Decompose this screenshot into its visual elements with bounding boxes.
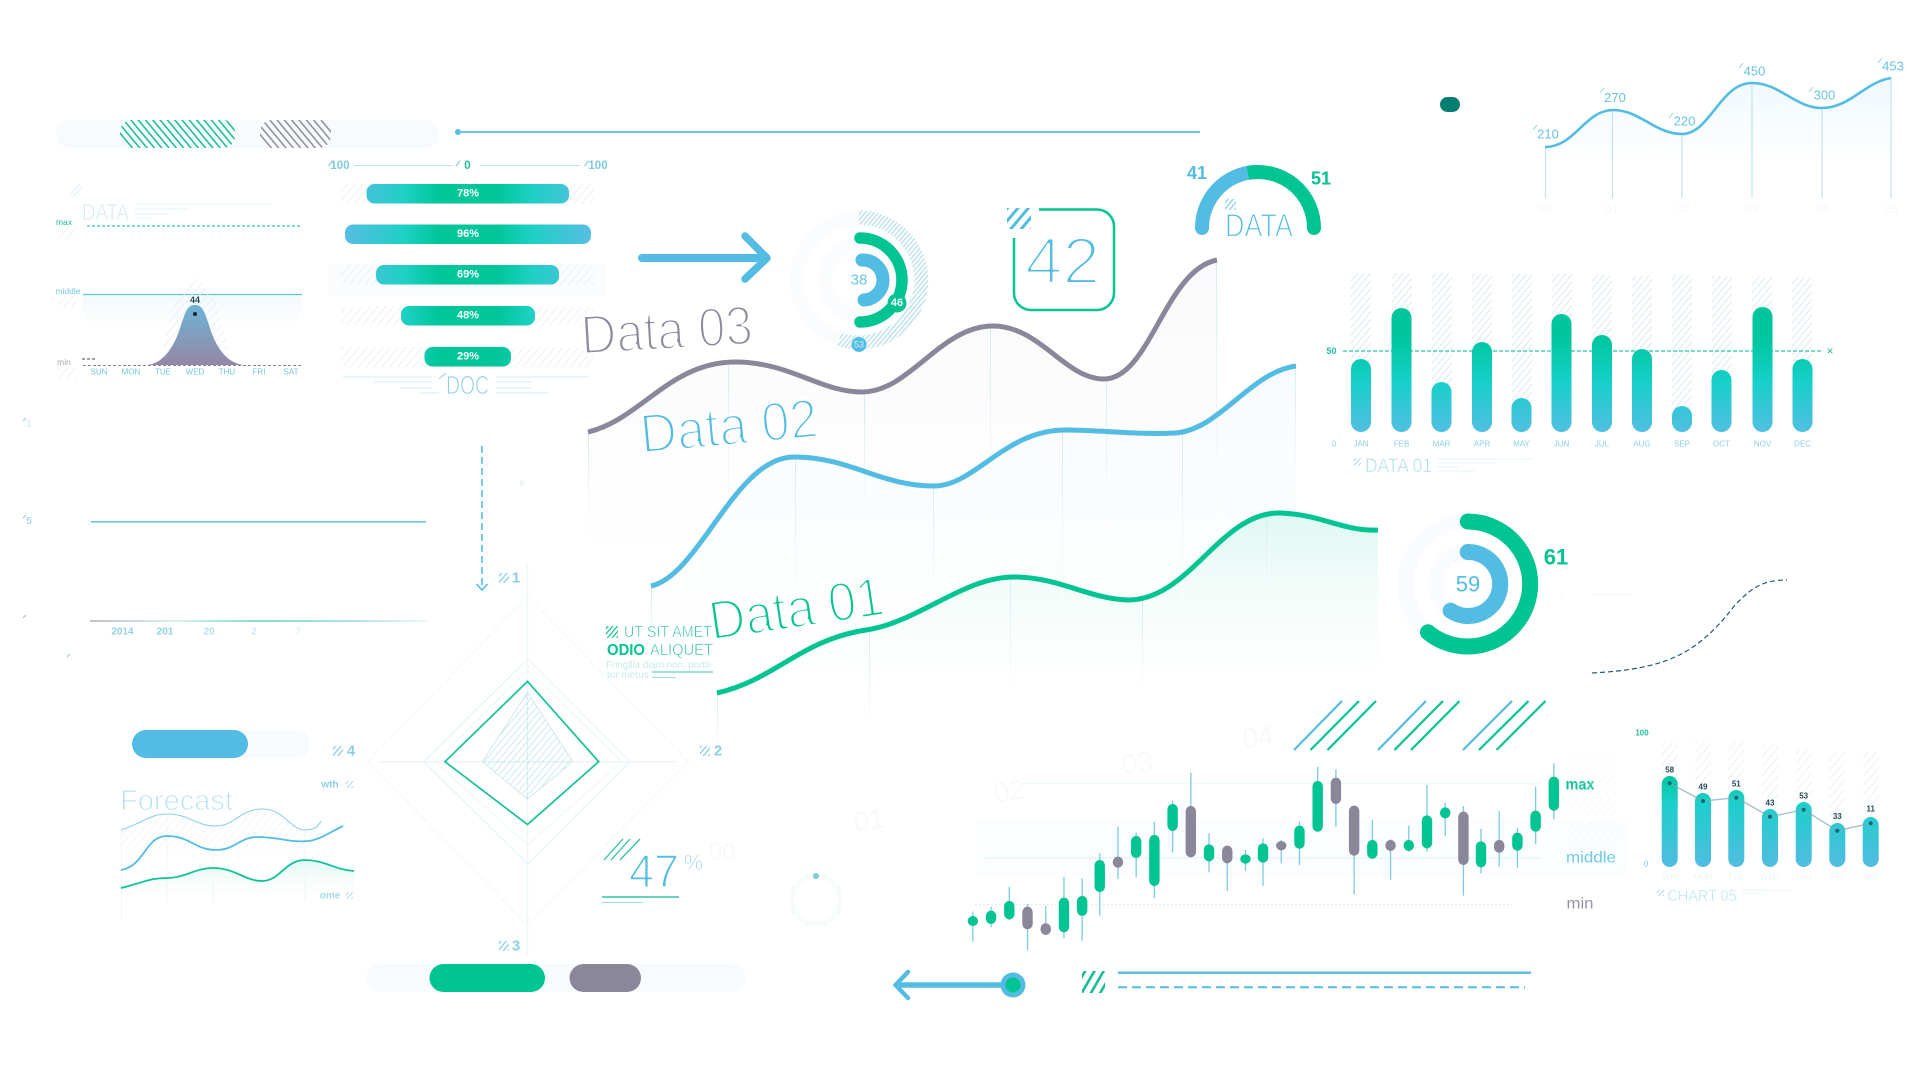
- panel: faint left lines: 1: [26, 418, 32, 430]
- heading Forecast: Forecast: [120, 785, 233, 817]
- label DOC: [343, 370, 589, 400]
- series Data 01 curve: [717, 513, 1378, 693]
- top pill bar: [56, 120, 439, 148]
- bottom pill bar: [366, 964, 746, 992]
- panel: chart 05 bars: 100: [1635, 728, 1649, 738]
- day labels: SUN: [1661, 872, 1678, 882]
- value labels: 58: [1665, 766, 1675, 774]
- weekday labels: FRI: [253, 368, 265, 376]
- trend line: [1668, 781, 1873, 833]
- bar 29%: [424, 347, 511, 366]
- curve middle: [121, 826, 343, 870]
- donut chart 59 / 61: 59: [1456, 572, 1480, 596]
- panel: forecast mini chart: [120, 780, 354, 921]
- bar 69%: [376, 265, 559, 284]
- label DATA 01: DATA 01: [1365, 456, 1432, 477]
- triple slash decoration: [1294, 701, 1546, 750]
- curve bottom: [121, 860, 354, 888]
- scale header: 100: [588, 160, 608, 172]
- value labels: 300: [1814, 88, 1835, 102]
- upper line: [91, 521, 426, 523]
- scale header: [329, 160, 608, 172]
- faint spinner: [792, 873, 840, 924]
- text block: UT SIT AMET: UT SIT AMET: [624, 624, 712, 641]
- bar 69%: 69%: [457, 268, 479, 280]
- faint axis labels: [1538, 202, 1898, 216]
- half gauge 41 / 51: 41: [1187, 163, 1207, 183]
- axis labels: 3: [512, 938, 520, 954]
- value labels: 11: [1866, 804, 1875, 814]
- year labels: 20: [203, 626, 215, 638]
- weekday labels: SAT: [284, 368, 299, 376]
- bars: [1351, 307, 1812, 432]
- weekday labels: THU: [219, 368, 235, 376]
- year labels: 2: [251, 626, 257, 638]
- value labels: 49: [1699, 782, 1708, 792]
- day labels: SAT: [1863, 872, 1878, 882]
- lower multicolor line: [90, 620, 427, 622]
- top timeline line: [455, 129, 1200, 135]
- bar 48%: 48%: [457, 310, 479, 322]
- axis labels: 2: [714, 742, 722, 760]
- panel: monthly bar chart: 50: [1326, 346, 1337, 356]
- month labels: NOV: [1754, 440, 1772, 448]
- progress pill blue: [132, 730, 310, 758]
- concentric radial gauge: 53: [854, 340, 864, 350]
- concentric radial gauge: 38: [851, 272, 867, 288]
- text block: UT SIT AMET: tor metus.: [607, 670, 651, 681]
- axis labels max middle min: middle: [55, 286, 81, 296]
- text block: UT SIT AMET: Fringilla diam non, portti-: [606, 660, 713, 671]
- axis labels max middle min: max: [56, 217, 73, 227]
- faint axis labels: 04: [1815, 202, 1829, 216]
- scale header: 100: [330, 160, 350, 172]
- month labels: JAN: [1353, 440, 1369, 448]
- bar 29%: 29%: [457, 350, 479, 362]
- value labels: 453: [1882, 58, 1904, 74]
- value labels: 270: [1604, 90, 1626, 105]
- axis labels max middle min: min: [57, 357, 71, 367]
- hatched backgrounds: [1351, 273, 1812, 409]
- bar 96%: [345, 224, 591, 244]
- value labels: [1533, 58, 1904, 142]
- area fills: [588, 260, 1378, 720]
- dashed arrow down: [476, 446, 488, 590]
- hump area: 44: [190, 295, 200, 305]
- month labels: FEB: [1394, 440, 1409, 448]
- hump area: [147, 275, 244, 365]
- label Data 02: Data 02: [637, 387, 820, 465]
- half gauge 41 / 51: DATA: [1225, 208, 1294, 244]
- panel: chart 05 bars: [1635, 728, 1879, 905]
- concentric radial gauge: [797, 218, 921, 352]
- text block: UT SIT AMET: ALIQUET: [650, 642, 713, 659]
- heading: DATA: DATA: [82, 199, 130, 225]
- scale header: 0: [464, 160, 471, 172]
- panel: faint left lines: 5: [26, 516, 32, 527]
- value labels: 220: [1674, 114, 1695, 128]
- number card 42: [1007, 208, 1114, 310]
- month labels: MAR: [1433, 440, 1451, 448]
- weekday labels: MON: [122, 368, 141, 376]
- faint axis labels: 00: [1538, 202, 1552, 216]
- faint axis numerals: 03: [1119, 745, 1155, 781]
- year labels: 2014: [111, 626, 134, 638]
- donut chart 59 / 61: 61: [1544, 544, 1568, 570]
- half gauge 41 / 51: [1187, 163, 1331, 244]
- stat 47%: %: [684, 850, 703, 875]
- faint axis labels: 03: [1745, 202, 1759, 216]
- axis labels max middle min: [55, 217, 81, 379]
- year labels: [111, 626, 301, 638]
- day labels: THU: [1795, 872, 1812, 882]
- series Data 02 curve: [651, 366, 1296, 586]
- bars: [1662, 776, 1879, 867]
- month labels: 0: [1332, 440, 1337, 448]
- faint axis numerals: 04: [1240, 719, 1276, 755]
- faint axis labels: 02: [1675, 202, 1689, 216]
- month labels: JUN: [1554, 440, 1569, 448]
- number card 42: 42: [1025, 224, 1100, 298]
- series Data 03 curve: [588, 260, 1217, 432]
- donut chart 59 / 61: [1406, 522, 1631, 646]
- weekday labels: [91, 368, 299, 376]
- candles: [968, 763, 1559, 950]
- faint axis labels: 05: [1884, 202, 1898, 216]
- day labels: TUE: [1728, 872, 1744, 882]
- month labels: [1332, 440, 1811, 448]
- faint axis numerals: 01: [851, 802, 887, 838]
- dashed s-curve: [1592, 580, 1787, 673]
- legend labels: [320, 780, 353, 902]
- outer green polygon: [445, 681, 599, 824]
- candlestick chart: middle: [1566, 850, 1616, 866]
- label CHART 05: [1657, 888, 1792, 905]
- value labels: 51: [1732, 780, 1741, 788]
- stat 47%: 00: [709, 838, 735, 866]
- label CHART 05: CHART 05: [1668, 888, 1737, 905]
- main line chart: [579, 260, 1378, 753]
- weekday labels: WED: [186, 368, 205, 376]
- concentric radial gauge: 46: [891, 297, 903, 309]
- day labels: WED: [1761, 872, 1780, 882]
- value labels: 33: [1833, 812, 1842, 821]
- bar 96%: 96%: [457, 228, 479, 240]
- faint axis numerals: 02: [991, 773, 1027, 809]
- curve top: [121, 809, 321, 830]
- month labels: OCT: [1713, 440, 1730, 448]
- reference lines: [975, 784, 1630, 904]
- weekday labels: SUN: [91, 368, 108, 376]
- level labels: max: [1566, 776, 1595, 794]
- bar 78%: 78%: [457, 188, 479, 200]
- half gauge 41 / 51: 51: [1311, 168, 1331, 188]
- footer rule lines: [1082, 971, 1531, 993]
- weekday labels: TUE: [155, 368, 171, 376]
- year labels: 201: [157, 626, 174, 638]
- faint axis numerals: [851, 719, 1276, 838]
- month labels: MAY: [1513, 440, 1531, 448]
- label DOC: DOC: [446, 370, 489, 400]
- axis labels: 1: [512, 570, 520, 586]
- axis labels: [333, 570, 722, 954]
- panel: chart 05 bars: 0: [1644, 860, 1649, 868]
- stat 47%: 47: [629, 845, 679, 897]
- panel: top right line chart: [1533, 58, 1904, 216]
- candlestick chart: min: [1566, 896, 1594, 912]
- month labels: JUL: [1595, 440, 1610, 448]
- month labels: AUG: [1633, 440, 1651, 448]
- axis labels: 4: [347, 742, 356, 760]
- month labels: SEP: [1674, 440, 1690, 448]
- small teal marker: [1440, 97, 1460, 112]
- value labels: 43: [1766, 798, 1775, 808]
- panel: monthly bar chart: ×: [1826, 344, 1834, 358]
- bar 78%: [366, 184, 569, 204]
- day labels: [1661, 872, 1878, 882]
- year labels: 2: [295, 626, 301, 638]
- vertical guides: [588, 260, 1296, 753]
- label DATA 01: [1354, 456, 1533, 477]
- value labels: 210: [1537, 126, 1559, 142]
- value labels: 53: [1799, 792, 1809, 800]
- arrow left with node: [896, 972, 1026, 998]
- panel: diverging percentage bars: [329, 160, 608, 400]
- value labels: 450: [1744, 64, 1765, 78]
- hatched backgrounds: [1662, 742, 1879, 824]
- text block: UT SIT AMET: [606, 624, 713, 681]
- candlestick chart: [968, 755, 1630, 950]
- value labels: [1665, 766, 1875, 821]
- heading: DATA: [71, 184, 273, 225]
- month labels: APR: [1474, 440, 1490, 448]
- faint axis labels: 01: [1605, 202, 1619, 216]
- day labels: FRI: [1831, 872, 1844, 882]
- bar 48%: [401, 306, 535, 326]
- inner hatched polygon: [482, 692, 573, 799]
- text: 0: [520, 480, 524, 488]
- stat 47%: [602, 838, 735, 902]
- radar chart: [333, 565, 722, 956]
- big arrow right: [642, 236, 767, 279]
- panel: bell curve chart: [55, 184, 302, 379]
- month labels: DEC: [1794, 440, 1811, 448]
- day labels: MON: [1694, 872, 1713, 882]
- text block: UT SIT AMET: ODIO: [607, 642, 645, 659]
- legend labels: wth: [320, 780, 339, 790]
- label Data 03: Data 03: [579, 294, 754, 366]
- legend labels: ome: [320, 890, 341, 902]
- panel: monthly bar chart: [1326, 273, 1834, 477]
- label Data 01: Data 01: [705, 565, 888, 652]
- panel: faint left lines: [23, 418, 427, 657]
